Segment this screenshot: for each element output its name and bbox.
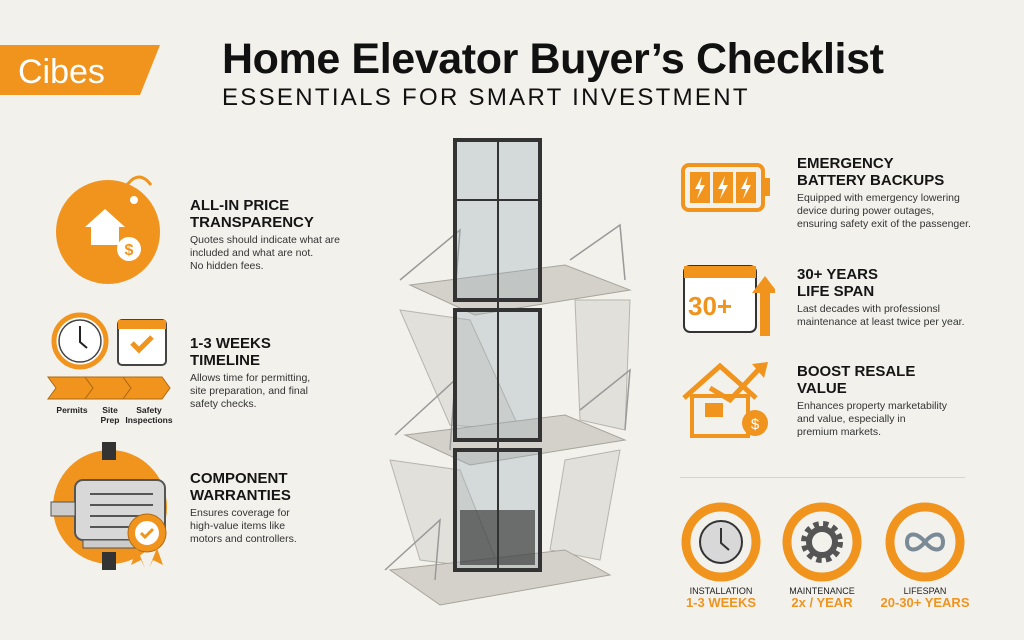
text: maintenance at least twice per year.	[797, 316, 965, 328]
icon: clock calendar timeline: Site	[102, 405, 118, 415]
text	[190, 197, 340, 272]
text: ALL-IN PRICE	[190, 197, 289, 214]
text: Quotes should indicate what are	[190, 234, 340, 246]
stat: lifespan	[880, 502, 970, 610]
text: No hidden fees.	[190, 260, 264, 272]
text: COMPONENT	[190, 470, 288, 487]
icon: clock calendar timeline: Safety	[136, 405, 162, 415]
text: Equipped with emergency lowering	[797, 192, 960, 204]
panel: warranties	[50, 442, 297, 570]
stat: lifespan: 20-30+ YEARS	[880, 595, 970, 610]
text: Enhances property marketability	[797, 400, 947, 412]
text	[190, 470, 297, 545]
icon: clock calendar timeline	[47, 312, 173, 425]
title: Home Elevator Buyer’s Checklist	[222, 35, 884, 83]
text: 1-3 WEEKS	[190, 335, 271, 352]
text: motors and controllers.	[190, 533, 297, 545]
text: safety checks.	[190, 398, 257, 410]
stat: maintenance: MAINTENANCE	[789, 586, 855, 596]
panel: resale	[682, 362, 947, 438]
text	[797, 266, 965, 328]
text	[797, 155, 971, 230]
text: TIMELINE	[190, 352, 260, 369]
text: included and what are not.	[190, 247, 313, 259]
text: and value, especially in	[797, 413, 906, 425]
text: ensuring safety exit of the passenger.	[797, 218, 971, 230]
text: TRANSPARENCY	[190, 214, 314, 231]
text: site preparation, and final	[190, 385, 308, 397]
icon: clock calendar timeline: Prep	[101, 415, 119, 425]
icon: house with arrow	[682, 362, 768, 438]
text: premium markets.	[797, 426, 881, 438]
text: LIFE SPAN	[797, 283, 874, 300]
text: BOOST RESALE	[797, 363, 915, 380]
stat: maintenance: 2x / YEAR	[791, 595, 853, 610]
text: Last decades with professionsl	[797, 303, 940, 315]
text	[190, 335, 310, 410]
stat: lifespan: LIFESPAN	[904, 586, 946, 596]
panel: price transparency	[56, 176, 340, 284]
subtitle: ESSENTIALS FOR SMART INVESTMENT	[222, 84, 750, 111]
stat: installation: INSTALLATION	[690, 586, 752, 596]
icon: calendar 30+	[683, 265, 775, 336]
icon: motor with badge	[50, 442, 167, 570]
text: BATTERY BACKUPS	[797, 172, 944, 189]
icon: battery	[681, 163, 770, 212]
icon: clock calendar timeline: Permits	[56, 405, 88, 415]
text: device during power outages,	[797, 205, 934, 217]
text: Allows time for permitting,	[190, 372, 310, 384]
stat: installation	[682, 502, 760, 610]
panel: battery	[681, 155, 971, 230]
text: high-value items like	[190, 520, 285, 532]
icon: price tag house	[56, 176, 160, 284]
elevator illustration	[384, 138, 632, 606]
panel: timeline	[47, 312, 310, 425]
panel: lifespan	[683, 265, 965, 336]
logo	[0, 45, 160, 95]
stat: installation: 1-3 WEEKS	[686, 595, 756, 610]
icon: clock calendar timeline: Inspections	[125, 415, 173, 425]
icon: house with arrow: $	[751, 416, 760, 433]
text: Ensures coverage for	[190, 507, 290, 519]
text: WARRANTIES	[190, 487, 291, 504]
stat: maintenance	[782, 502, 862, 610]
text: EMERGENCY	[797, 155, 894, 172]
icon: calendar 30+: 30+	[688, 291, 732, 321]
logo: Cibes	[18, 53, 105, 91]
icon: price tag house: $	[125, 242, 134, 259]
text: VALUE	[797, 380, 847, 397]
text: 30+ YEARS	[797, 266, 878, 283]
text	[797, 363, 947, 438]
